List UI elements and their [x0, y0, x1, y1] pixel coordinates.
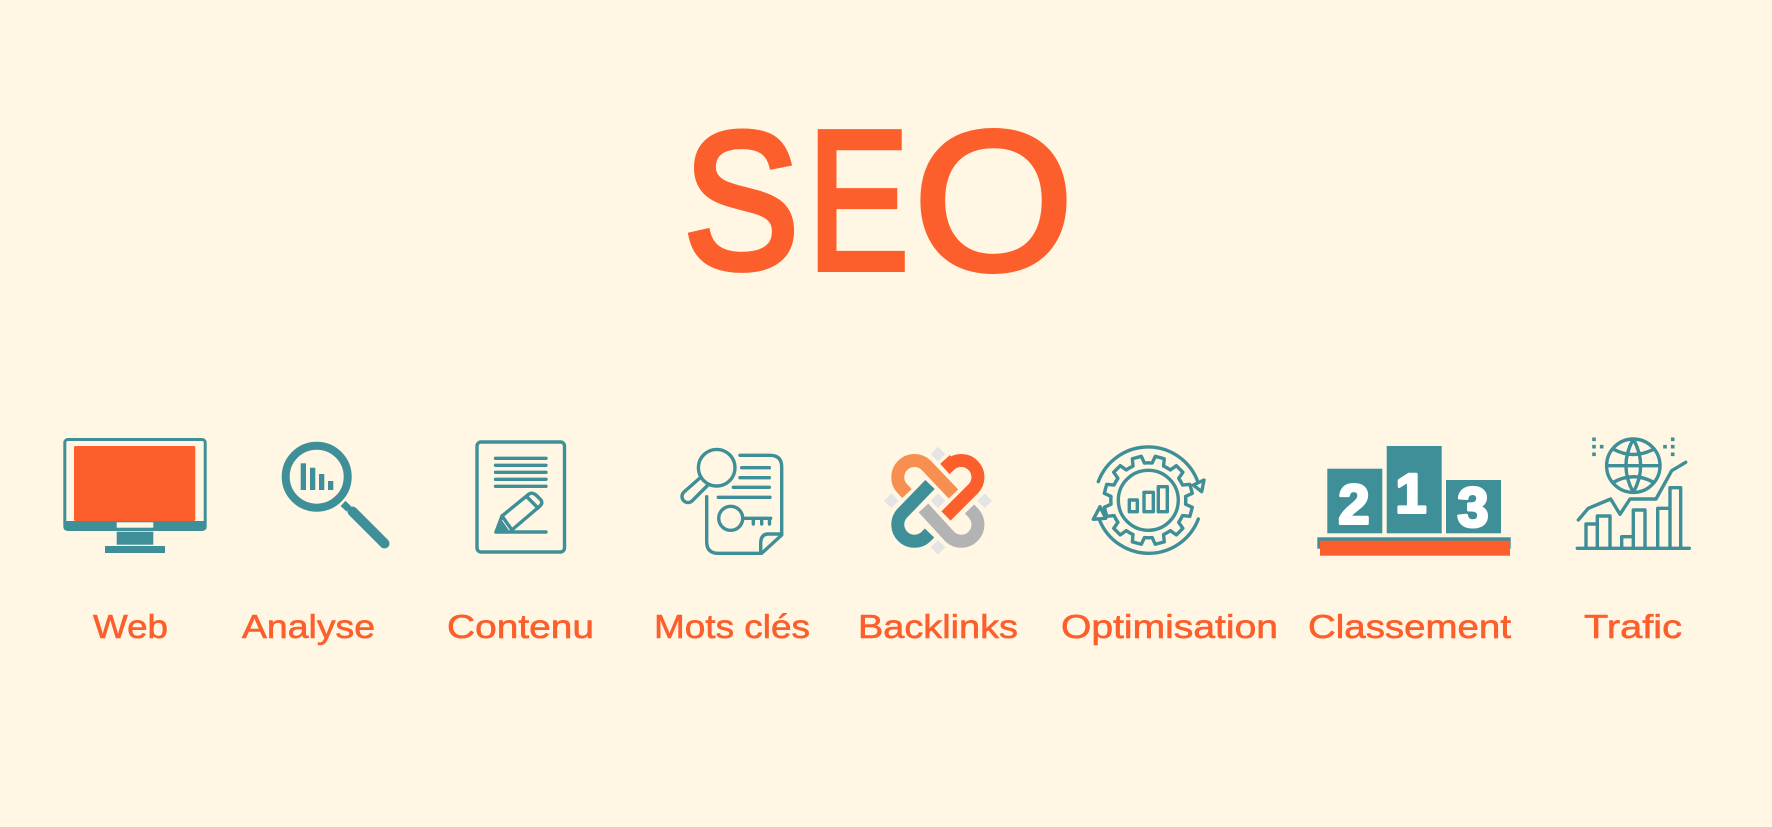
- title: SEO: O: [913, 89, 1074, 312]
- icon: podium: [1317, 446, 1511, 556]
- label: Contenu: Contenu: [447, 608, 594, 645]
- panel: Web: [64, 440, 206, 645]
- label: Backlinks: Backlinks: [858, 608, 1018, 645]
- icon: podium: 3: [1457, 476, 1489, 538]
- panel: Optimisation: [1061, 447, 1278, 645]
- icon: podium: 2: [1338, 472, 1370, 536]
- icon: globe and growth chart: [1577, 438, 1689, 548]
- title: SEO: S: [684, 92, 799, 309]
- panel: Trafic: [1577, 438, 1689, 645]
- label: Analyse: Analyse: [242, 608, 375, 645]
- icon: magnifier, key and document: [682, 449, 782, 553]
- icon: computer monitor: [64, 440, 206, 553]
- icon: podium: 1: [1395, 462, 1427, 524]
- panel: Contenu: [447, 442, 594, 645]
- panel: Analyse: [242, 446, 384, 645]
- icon: magnifier with bars: [286, 446, 384, 544]
- panel: Classement: [1308, 446, 1511, 645]
- label: Optimisation: Optimisation: [1061, 608, 1278, 645]
- title: SEO: E: [808, 89, 909, 312]
- label: Classement: Classement: [1308, 608, 1511, 645]
- icon: interlaced links: [884, 447, 992, 555]
- label: Mots clés: Mots clés: [654, 608, 810, 645]
- panel: Backlinks: [858, 447, 1018, 645]
- label: Trafic: Trafic: [1584, 608, 1682, 645]
- icon: gear with chart and cycle arrows: [1093, 447, 1204, 553]
- icon: document with pencil: [477, 442, 564, 552]
- title: SEO: [684, 89, 1074, 312]
- panel: Mots clés: [654, 449, 810, 645]
- label: Web: Web: [93, 608, 168, 645]
